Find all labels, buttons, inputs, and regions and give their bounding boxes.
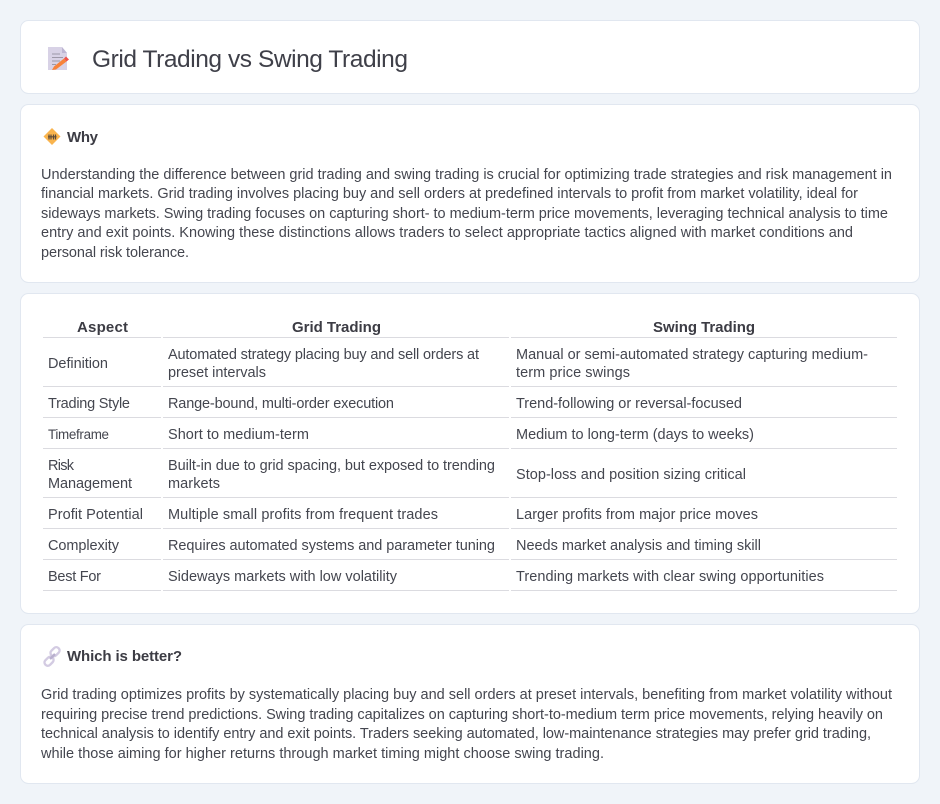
row: definition xyxy=(48,347,868,381)
text block: why explanation: entry and exit points. Knowing these distinctions allows traders to select appropriate tactics aligned with market conditions and xyxy=(41,225,853,241)
row: complexity: Requires automated systems and parameter tuning xyxy=(168,538,495,554)
row: trading style: Trading Style xyxy=(48,396,130,412)
row: risk management: Management xyxy=(48,476,132,492)
icon: chain link xyxy=(43,646,61,667)
panel: why xyxy=(20,104,920,282)
row: profit potential: Profit Potential xyxy=(48,507,143,523)
row: definition: preset intervals xyxy=(168,365,266,381)
row: timeframe xyxy=(48,427,754,443)
row: risk management xyxy=(48,458,746,492)
table header row: Grid Trading xyxy=(292,319,381,336)
row: risk management: Stop-loss and position sizing critical xyxy=(516,467,746,483)
row: definition: Definition xyxy=(48,356,108,372)
table header row: Swing Trading xyxy=(653,319,755,336)
row: best for xyxy=(48,569,824,585)
row: profit potential: Larger profits from major price moves xyxy=(516,507,758,523)
title: Grid Trading vs Swing Trading xyxy=(92,46,408,73)
table header row: Aspect xyxy=(77,319,128,336)
row: trading style xyxy=(48,396,742,412)
row: risk management: markets xyxy=(168,476,220,492)
row: profit potential xyxy=(48,507,758,523)
row: definition: Manual or semi-automated strategy capturing medium- xyxy=(516,347,868,363)
text block: verdict: technical analysis to identify entry and exit points. Traders seeking automated, low-maintenance strategies may prefer grid trading, xyxy=(41,726,871,742)
row: best for: Trending markets with clear swing opportunities xyxy=(516,569,824,585)
row: profit potential: Multiple small profits from frequent trades xyxy=(168,507,438,523)
text block: verdict: requiring precise trend predictions. Swing trading capitalizes on capturing short-to-medium term price movements, relying heavily on xyxy=(41,707,883,723)
text block: verdict: Grid trading optimizes profits by systematically placing buy and sell orders at preset intervals, benefiting from market volatility without xyxy=(41,687,892,703)
heading: which is better: Which is better? xyxy=(67,648,182,665)
icon: warning diamond xyxy=(44,128,60,145)
row: definition: term price swings xyxy=(516,365,630,381)
row: risk management: Built-in due to grid spacing, but exposed to trending xyxy=(168,458,495,474)
text block: verdict: while those aiming for higher returns through market timing might choose swing trading. xyxy=(40,746,604,762)
heading: why: Why xyxy=(67,129,99,146)
text block: why explanation xyxy=(41,167,892,261)
row: best for: Sideways markets with low volatility xyxy=(168,569,398,585)
panel: which is better xyxy=(20,624,920,784)
icon: document with pencil xyxy=(48,47,69,70)
row: trading style: Trend-following or reversal-focused xyxy=(516,396,742,412)
text block: why explanation: Understanding the difference between grid trading and swing trading is crucial for optimizing trade strategies and risk management in xyxy=(41,167,892,183)
text block: why explanation: sideways markets. Swing trading focuses on capturing short- to medium-term price movements, leveraging technical analysis to time xyxy=(41,206,888,222)
row: timeframe: Timeframe xyxy=(48,427,109,442)
row: complexity: Needs market analysis and timing skill xyxy=(516,538,761,554)
text block: verdict xyxy=(40,687,892,762)
row: definition: Automated strategy placing buy and sell orders at xyxy=(168,347,479,363)
row: best for: Best For xyxy=(48,569,101,585)
row: trading style: Range-bound, multi-order execution xyxy=(168,396,394,412)
text block: why explanation: financial markets. Grid trading involves placing buy and sell orders at predefined intervals to profit from market volatility, ideal for xyxy=(41,186,858,202)
table header row xyxy=(77,319,755,336)
row: timeframe: Medium to long-term (days to weeks) xyxy=(516,427,754,443)
row: risk management: Risk xyxy=(48,458,75,474)
row: complexity xyxy=(48,538,761,554)
panel: title header xyxy=(20,20,920,94)
panel: comparison table xyxy=(20,294,920,614)
text block: why explanation: personal risk tolerance. xyxy=(41,245,189,261)
row: timeframe: Short to medium-term xyxy=(168,427,309,443)
row: complexity: Complexity xyxy=(48,538,120,554)
